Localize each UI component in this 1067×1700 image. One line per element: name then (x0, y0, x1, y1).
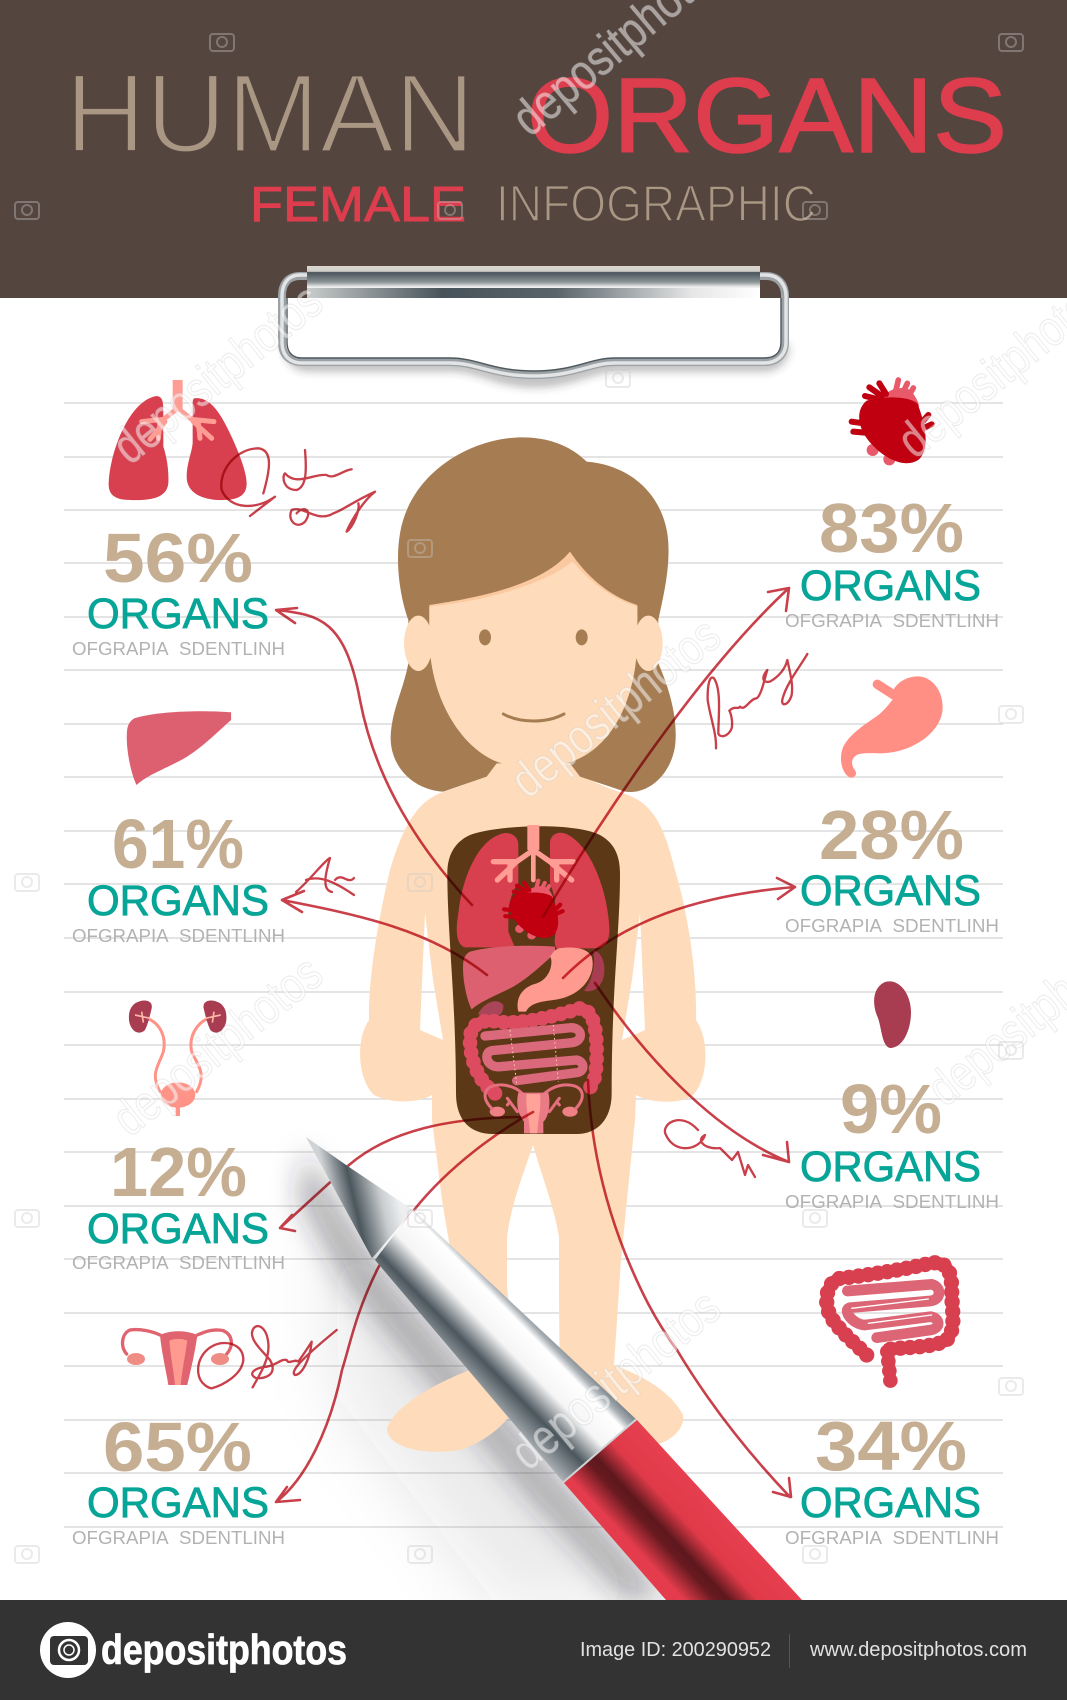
stat: 61%: ORGANS (87, 877, 269, 925)
pen silver barrel (375, 1210, 637, 1483)
title: human organs (65, 51, 1007, 176)
signature: heart note (708, 654, 807, 748)
ruled lines (64, 403, 1003, 1527)
signature: spleen note (665, 1120, 755, 1177)
kidney (478, 1001, 503, 1017)
header band (0, 0, 1067, 298)
signature: uterus note (198, 1326, 337, 1388)
stat: 9%: OFGRAPIA SDENTLINH (785, 1191, 999, 1212)
stat: 28%: ORGANS (800, 867, 981, 915)
stat: 83%: OFGRAPIA SDENTLINH (785, 610, 999, 631)
stat: 83% (785, 489, 999, 631)
stat: 56%: OFGRAPIA SDENTLINH (72, 638, 285, 659)
stat: 9%: ORGANS (800, 1143, 981, 1191)
icon: stomach (841, 676, 943, 778)
icon: intestines (827, 1263, 953, 1383)
icon: lungs (109, 380, 247, 500)
small intestine (485, 1025, 583, 1083)
organ panel (447, 825, 620, 1134)
large intestine (470, 1008, 597, 1093)
image id: Image ID: 200290952 (580, 1639, 771, 1661)
uterus (485, 1085, 582, 1133)
stat: 9% (785, 1070, 999, 1212)
ears (404, 616, 663, 671)
subtitle: female infographic: INFOGRAPHIC (496, 175, 816, 232)
stat: 61% (72, 805, 285, 946)
body (360, 755, 705, 1452)
stat: 34% (785, 1407, 999, 1548)
face (429, 562, 637, 768)
heart (504, 881, 563, 939)
stat: 12% (72, 1133, 285, 1273)
watermark: depositphotos (102, 944, 333, 1147)
website: www.depositphotos.com (809, 1639, 1027, 1661)
footer bar (0, 1600, 1067, 1700)
pen ferrule (564, 1420, 637, 1483)
stat: 61%: OFGRAPIA SDENTLINH (72, 925, 285, 946)
stat: 65%: ORGANS (87, 1479, 269, 1527)
arrow: uterus to 65% (276, 1112, 533, 1502)
icon: uterus (123, 1330, 231, 1385)
stat: 34%: OFGRAPIA SDENTLINH (785, 1527, 999, 1548)
stat: 12%: 12% (110, 1133, 247, 1211)
icon: spleen (874, 981, 911, 1048)
pen nib cone (306, 1137, 413, 1258)
stat: 83%: 83% (819, 489, 964, 567)
stat: 28%: 28% (819, 796, 964, 874)
watermark: depositphotos (500, 606, 731, 809)
watermark: depositphotos (102, 272, 333, 475)
stat: 56%: ORGANS (87, 590, 269, 638)
stat: 61%: 61% (112, 805, 244, 883)
woman figure (360, 437, 705, 1452)
subtitle: female infographic (250, 175, 816, 232)
icon: heart (852, 380, 932, 465)
lungs (457, 825, 609, 948)
watermark: depositphotos (500, 1278, 731, 1481)
arrow: spleen to 9% (595, 983, 789, 1162)
clipboard clip (282, 266, 790, 388)
arrow: lungs to 56% (276, 608, 472, 905)
arrow: kidneys to 12% (280, 1117, 520, 1231)
stat: 12%: OFGRAPIA SDENTLINH (72, 1252, 285, 1273)
torso cavity (447, 826, 620, 1134)
signature: lungs note (221, 448, 375, 532)
stat: 83%: ORGANS (800, 562, 981, 610)
stat: 65%: OFGRAPIA SDENTLINH (72, 1527, 285, 1548)
icon: kidneys and bladder (129, 1001, 226, 1116)
stat: 56%: 56% (103, 519, 253, 597)
arrow: liver to 61% (282, 891, 487, 975)
arrow: stomach to 28% (563, 878, 795, 978)
stat: 9%: 9% (840, 1070, 942, 1148)
spleen (584, 950, 604, 991)
head (391, 437, 676, 792)
arrow: heart to 83% (543, 588, 789, 917)
stat: 65% (72, 1408, 285, 1548)
pen shadow (298, 1150, 668, 1610)
smile (503, 714, 564, 721)
stomach (518, 948, 593, 1012)
stat: 65%: 65% (103, 1408, 252, 1486)
stat: 56% (72, 519, 285, 659)
icon: liver (127, 711, 231, 785)
stat: 28%: OFGRAPIA SDENTLINH (785, 915, 999, 936)
stat: 34%: ORGANS (800, 1479, 981, 1527)
title: human organs: HUMAN (65, 51, 475, 176)
stat: 12%: ORGANS (87, 1205, 269, 1253)
stat: 28% (785, 796, 999, 936)
pen (306, 1137, 802, 1600)
signature: liver note (296, 858, 354, 895)
arrow: intestine to 34% (588, 1080, 791, 1497)
eyes (479, 629, 588, 645)
fringe shadow (429, 552, 637, 630)
stat: 34%: 34% (815, 1407, 967, 1485)
footer logo (40, 1622, 347, 1678)
subtitle: female infographic: FEMALE (250, 178, 466, 232)
pen red body (564, 1420, 802, 1600)
liver (463, 946, 555, 1009)
footer logo: depositphotos (101, 1626, 347, 1673)
title: human organs: ORGANS (527, 57, 1007, 175)
paper background (0, 298, 1067, 1600)
hair (391, 437, 676, 792)
